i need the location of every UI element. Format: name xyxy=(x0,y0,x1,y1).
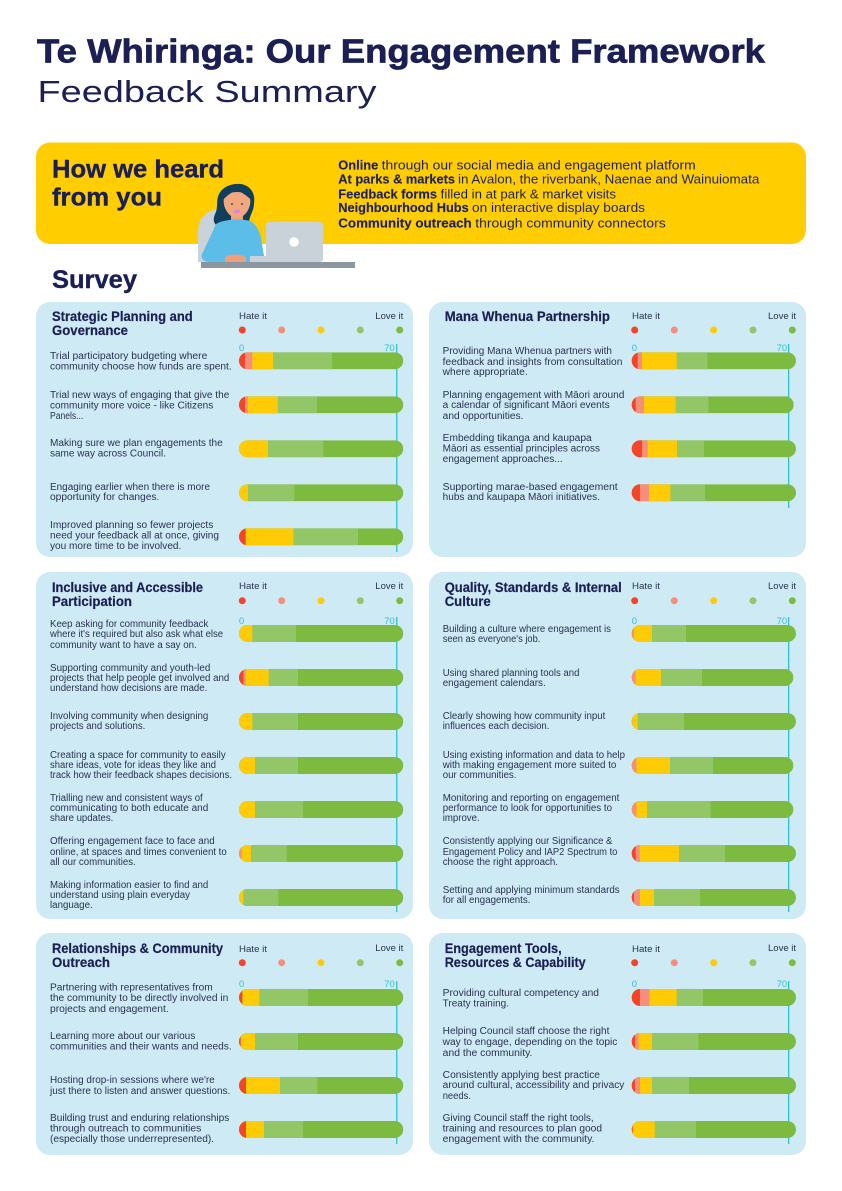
axis 0 to 70 xyxy=(632,615,789,912)
row: right tools and training: Giving Council staff the right tools, xyxy=(443,1113,594,1124)
axis 0 to 70 xyxy=(632,342,789,508)
panel heading: Engagement Tools, xyxy=(445,941,562,956)
row: community and youth-led projects: Supporting community and youth-led xyxy=(50,663,210,674)
legend scale: Hate it xyxy=(632,581,660,592)
row: partnering with representatives xyxy=(50,983,403,1015)
list of engagement channels: in Avalon, the riverbank, Naenae and Wainuiomata xyxy=(458,172,760,187)
panel: inclusive and accessible participation xyxy=(36,572,413,919)
row: choosing the right way: way to engage, depending on the topic xyxy=(442,1037,617,1048)
legend scale: Hate it xyxy=(632,311,660,322)
axis 0 to 70: 70 xyxy=(384,615,395,626)
row: showing community input xyxy=(443,712,796,730)
panel: engagement tools, resources and capability xyxy=(429,933,806,1155)
row: significance policy xyxy=(443,836,796,868)
legend scale xyxy=(239,943,404,966)
row: building trust: (especially those underrepresented). xyxy=(50,1134,214,1145)
row: minimum standards: Setting and applying minimum standards xyxy=(443,885,620,896)
panel heading xyxy=(52,941,223,970)
legend scale: Love it xyxy=(768,311,796,322)
row: existing information and data: our communities. xyxy=(443,770,516,781)
banner heading xyxy=(52,156,224,212)
legend scale xyxy=(631,581,796,604)
row: improved planning: need your feedback all at once, giving xyxy=(50,531,219,542)
row: offering engagement face to face: all our communities. xyxy=(50,857,136,868)
row: keep asking for feedback: community want to have a say on. xyxy=(50,640,197,651)
row: minimum standards: for all engagements. xyxy=(443,895,530,906)
legend scale: Hate it xyxy=(239,311,267,322)
icon: woman at laptop xyxy=(198,184,355,268)
legend scale: Love it xyxy=(768,943,796,954)
panel: strategic planning and governance xyxy=(36,302,413,557)
legend scale xyxy=(631,943,796,966)
row: engaging earlier: opportunity for changes. xyxy=(50,492,159,503)
panel heading: Participation xyxy=(52,594,132,609)
row: minimum standards xyxy=(443,885,796,906)
row: showing community input: influences each decision. xyxy=(443,721,549,732)
row: learning about communities xyxy=(50,1032,404,1050)
legend scale: Hate it xyxy=(632,944,660,955)
axis 0 to 70: 70 xyxy=(384,978,395,989)
row: information easier to find: Making information easier to find and xyxy=(50,880,208,891)
panel heading: Quality, Standards & Internal xyxy=(445,580,622,595)
row: involving community: projects and solutions. xyxy=(50,721,145,732)
axis 0 to 70 xyxy=(239,615,397,912)
row: plan engagements the same way: Making sure we plan engagements the xyxy=(50,438,223,449)
row: providing feedback xyxy=(442,346,796,378)
list of engagement channels: Online xyxy=(338,157,378,172)
row: right tools and training xyxy=(443,1113,796,1145)
row: embedding tikanga: Māori as essential principles across xyxy=(443,444,600,455)
list of engagement channels: filled in at park & market visits xyxy=(441,186,616,201)
row: participatory budgeting xyxy=(50,351,403,373)
axis 0 to 70: 0 xyxy=(239,978,244,989)
row: involving community xyxy=(50,711,403,732)
row: participatory budgeting: community choose how funds are spent. xyxy=(50,362,232,373)
row: planning engagement with Maori: a calendar of significant Māori events xyxy=(443,400,610,411)
row: providing feedback: where appropriate. xyxy=(442,367,528,378)
heading: survey: Survey xyxy=(52,266,137,294)
row: learning about communities: communities and their wants and needs. xyxy=(50,1042,232,1053)
row: choosing the right way: Helping Council staff choose the right xyxy=(443,1026,610,1037)
axis 0 to 70: 0 xyxy=(632,978,637,989)
row: creating a space xyxy=(50,750,403,781)
title xyxy=(37,33,766,109)
row: best practice: needs. xyxy=(443,1091,471,1102)
row: involving community: Involving community when designing xyxy=(50,711,208,722)
row: significance policy: Engagement Policy and IAP2 Spectrum to xyxy=(443,847,618,858)
row: keep asking for feedback xyxy=(49,619,403,651)
axis 0 to 70: 0 xyxy=(239,615,244,626)
panel: relationships and community outreach xyxy=(36,933,413,1155)
row: offering engagement face to face xyxy=(50,836,404,865)
row: monitoring and reporting: improve. xyxy=(443,813,480,824)
row: providing feedback: feedback and insights from consultation xyxy=(443,357,622,368)
row: existing information and data: with making engagement more suited to xyxy=(442,760,617,771)
row: trialling new ways: Trialling new and consistent ways of xyxy=(50,793,203,804)
panel: mana whenua partnership xyxy=(429,302,806,557)
panel heading: Relationships & Community xyxy=(52,941,223,956)
row: offering engagement face to face: Offering engagement face to face and xyxy=(50,836,215,847)
row: improved planning xyxy=(50,520,403,552)
row: improved planning: you more time to be involved. xyxy=(50,541,181,552)
panel heading xyxy=(445,941,586,970)
list of engagement channels: Feedback forms xyxy=(338,186,437,201)
legend scale: Love it xyxy=(768,581,796,592)
row: plan engagements the same way: same way across Council. xyxy=(50,449,166,460)
row: planning engagement with Maori: and opportunities. xyxy=(443,411,523,422)
legend scale: Love it xyxy=(375,311,404,322)
row: community and youth-led projects: projects that help people get involved and xyxy=(50,673,229,684)
axis 0 to 70: 0 xyxy=(239,342,244,353)
banner: how we heard from you xyxy=(36,142,806,244)
title: Feedback Summary xyxy=(38,74,377,109)
row: planning engagement with Maori: Planning engagement with Māori around xyxy=(443,390,624,401)
row: right tools and training: engagement with the community. xyxy=(443,1134,594,1145)
panel heading: Inclusive and Accessible xyxy=(52,580,203,595)
row: embedding tikanga: Embedding tikanga and kaupapa xyxy=(443,433,592,444)
list of engagement channels: At parks & markets xyxy=(338,172,455,187)
row: creating a space: Creating a space for community to easily xyxy=(50,750,226,761)
row: cultural competency xyxy=(443,988,796,1010)
row: engaging earlier: Engaging earlier when there is more xyxy=(50,482,211,493)
legend scale: Love it xyxy=(375,581,404,592)
axis 0 to 70: 70 xyxy=(384,342,395,353)
row: community and youth-led projects: understand how decisions are made. xyxy=(50,683,207,694)
row: monitoring and reporting: performance to look for opportunities to xyxy=(443,803,612,814)
row: providing feedback: Providing Mana Whenua partners with xyxy=(443,346,612,357)
row: citizens panels: community more voice - like Citizens xyxy=(50,400,213,411)
legend scale xyxy=(239,311,404,334)
panel heading xyxy=(52,309,193,338)
axis 0 to 70: 70 xyxy=(777,342,787,353)
row: creating a space: track how their feedback shapes decisions. xyxy=(50,770,232,781)
row: best practice: around cultural, accessibility and privacy xyxy=(443,1080,624,1091)
row: best practice xyxy=(443,1070,796,1099)
row: building trust xyxy=(50,1113,403,1145)
legend scale xyxy=(631,311,796,334)
row: partnering with representatives: Partnering with representatives from xyxy=(50,983,213,994)
row: partnering with representatives: projects and engagement. xyxy=(50,1004,169,1015)
row: right tools and training: training and resources to plan good xyxy=(443,1124,602,1135)
list of engagement channels xyxy=(338,157,760,230)
row: citizens panels: Trial new ways of engaging that give the xyxy=(50,390,230,401)
row: best practice: Consistently applying best practice xyxy=(443,1070,601,1081)
row: information easier to find xyxy=(50,880,403,911)
title: Te Whiringa: Our Engagement Framework xyxy=(37,33,766,70)
list of engagement channels: through community connectors xyxy=(475,215,666,230)
row: plan engagements the same way xyxy=(50,438,403,460)
row: existing information and data xyxy=(442,750,794,778)
panel heading: Governance xyxy=(52,323,128,338)
row: creating a space: share ideas, vote for ideas they like and xyxy=(50,760,216,771)
row: shared planning tools: Using shared planning tools and xyxy=(443,668,579,679)
row: existing information and data: Using existing information and data to help xyxy=(443,750,625,761)
axis 0 to 70 xyxy=(239,342,397,552)
panel heading xyxy=(445,580,622,609)
row: learning about communities: Learning more about our various xyxy=(50,1031,195,1042)
row: significance policy: Consistently applying our Significance & xyxy=(443,836,613,847)
list of engagement channels: Neighbourhood Hubs xyxy=(338,200,469,215)
row: community and youth-led projects xyxy=(50,664,404,691)
panel: quality, standards and internal culture xyxy=(429,572,806,919)
row: choosing the right way: and the community. xyxy=(443,1048,532,1059)
row: improved planning: Improved planning so fewer projects xyxy=(50,520,213,531)
panel heading: Outreach xyxy=(52,955,110,970)
row: culture of engagement: seen as everyone's job. xyxy=(443,634,540,645)
row: drop-in sessions: just there to listen and answer questions. xyxy=(49,1086,230,1097)
panel heading xyxy=(52,580,203,609)
row: shared planning tools xyxy=(443,668,793,689)
axis 0 to 70: 70 xyxy=(777,978,787,989)
row: marae-based hubs: hubs and kaupapa Māori initiatives. xyxy=(443,492,600,503)
row: participatory budgeting: Trial participatory budgeting where xyxy=(50,351,208,362)
row: keep asking for feedback: where it's required but also ask what else xyxy=(49,629,223,640)
panel heading: Resources & Capability xyxy=(445,955,586,970)
banner heading: How we heard xyxy=(52,156,224,184)
axis 0 to 70 xyxy=(632,978,789,1144)
panel heading: Mana Whenua Partnership xyxy=(445,309,610,324)
row: drop-in sessions: Hosting drop-in sessions where we're xyxy=(50,1075,215,1086)
row: citizens panels: Panels... xyxy=(50,411,83,422)
row: showing community input: Clearly showing how community input xyxy=(443,711,606,722)
row: embedding tikanga xyxy=(443,433,796,465)
row: culture of engagement: Building a culture where engagement is xyxy=(443,624,611,635)
row: trialling new ways: share updates. xyxy=(50,813,113,824)
legend scale: Hate it xyxy=(239,581,267,592)
list of engagement channels: through our social media and engagement platform xyxy=(382,157,696,172)
legend scale: Love it xyxy=(375,943,404,954)
banner heading: from you xyxy=(52,184,162,212)
list of engagement channels: on interactive display boards xyxy=(472,200,645,215)
row: trialling new ways xyxy=(50,793,403,824)
row: shared planning tools: engagement calendars. xyxy=(443,678,546,689)
panel heading: Strategic Planning and xyxy=(52,309,193,324)
row: offering engagement face to face: online, at spaces and times convenient to xyxy=(50,847,227,858)
axis 0 to 70: 70 xyxy=(777,615,787,626)
axis 0 to 70: 0 xyxy=(632,342,637,353)
row: monitoring and reporting: Monitoring and reporting on engagement xyxy=(443,793,620,804)
axis 0 to 70 xyxy=(239,978,397,1144)
axis 0 to 70: 0 xyxy=(632,615,637,626)
row: embedding tikanga: engagement approaches... xyxy=(443,454,563,465)
legend scale: Hate it xyxy=(239,944,267,955)
row: significance policy: choose the right approach. xyxy=(443,857,558,868)
row: planning engagement with Maori xyxy=(443,390,794,422)
row: drop-in sessions xyxy=(49,1075,403,1097)
row: marae-based hubs: Supporting marae-based engagement xyxy=(443,482,618,493)
row: marae-based hubs xyxy=(443,482,796,503)
row: trialling new ways: communicating to both educate and xyxy=(50,803,208,814)
row: culture of engagement xyxy=(443,624,796,645)
row: monitoring and reporting xyxy=(443,793,793,824)
row: information easier to find: understand using plain everyday xyxy=(50,890,190,901)
row: choosing the right way xyxy=(442,1026,796,1059)
legend scale xyxy=(239,581,404,604)
row: cultural competency: Providing cultural competency and xyxy=(443,988,599,999)
row: engaging earlier xyxy=(50,482,403,503)
panel heading: Culture xyxy=(445,594,491,609)
row: building trust: through outreach to communities xyxy=(50,1124,201,1135)
row: citizens panels xyxy=(50,390,404,419)
row: cultural competency: Treaty training. xyxy=(443,999,509,1010)
row: partnering with representatives: the community to be directly involved in xyxy=(50,993,228,1004)
list of engagement channels: Community outreach xyxy=(338,215,472,230)
row: building trust: Building trust and enduring relationships xyxy=(50,1113,229,1124)
row: information easier to find: language. xyxy=(50,900,93,911)
row: keep asking for feedback: Keep asking for community feedback xyxy=(50,619,208,630)
